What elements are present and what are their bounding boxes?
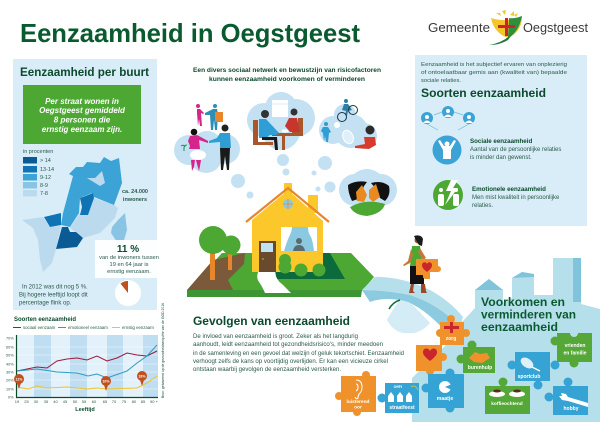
callout: 11 procent: 11 % [117,244,139,255]
legend: in procenten: 13-14 [40,167,54,173]
chart: soorten eenzaamheid: 40% [6,362,14,366]
chart: soorten eenzaamheid: 55 [82,399,87,404]
chart: soorten eenzaamheid: 30 [34,399,39,404]
puzzle: heart [416,345,447,375]
text: emotionele eenzaamheid: Men mist kwaliteit in persoonlijke [472,195,560,201]
body text: gevolgen: aanhoudt, leidt eenzaamheid tot gezondheidsrisico's, minder meedoen [193,342,383,348]
callout: 11 procent: 19 en 64 jaar is [110,262,149,268]
marker: 10 procent [101,376,111,391]
marker: 18 procent [137,371,147,386]
heading: gevolgen: Gevolgen van eenzaamheid [193,314,350,328]
chart: soorten eenzaamheid [6,303,165,413]
marker: 11 procent [14,374,24,389]
logo: Gemeente Oegstgeest: Oegstgeest [523,21,589,35]
chart legend: sociaal eenzaam [23,325,56,330]
definition text: sociale relaties. [421,78,461,84]
garden [187,253,374,291]
text: in 2012 [19,284,88,306]
text: emotionele eenzaamheid: Emotionele eenzaamheid [472,186,546,193]
shrubs [278,254,326,276]
definition text [421,62,567,84]
callout: 11 procent: ernstig eenzaam. [107,269,151,275]
callout: per straat: Per straat wonen in [45,97,119,106]
people: handshake [181,104,231,171]
city background [412,258,600,422]
puzzle: straatfeest: OffFt [394,385,403,389]
label: inwoners: ca. 24.000 [122,189,148,195]
puzzle: hobby: hobby [564,406,579,412]
title: Eenzaamheid in Oegstgeest [20,18,360,48]
icon: emotionele eenzaamheid [433,180,463,210]
icon: couple [348,181,390,216]
marker: 18 procent: 18% [138,374,146,378]
cloud: ontmoeten [174,104,240,173]
marker: 10 procent: 10% [102,380,110,384]
puzzle: koffieochtend [485,378,530,414]
pie chart: 11 procent [115,280,141,306]
people at table [253,100,303,150]
text: sociale eenzaamheid [470,138,561,161]
puzzle: hobby [544,378,588,415]
text: sociale eenzaamheid: is minder dan gewenst. [470,155,532,161]
icon: network [421,106,475,130]
chart: soorten eenzaamheid: 45 [63,399,68,404]
chart legend: emotioneel eenzaam [68,325,108,330]
text: in 2012: In 2012 was dit nog 5 %. [22,284,88,290]
callout: per straat [23,85,141,144]
heading: divers sociaal netwerk: kunnen eenzaamheid voorkomen of verminderen [209,76,365,83]
heading: soorten: Soorten eenzaamheid [421,86,546,100]
body text: gevolgen: ontstaan waarbij gevolgen de eenzaamheid versterken. [193,367,341,373]
chart: soorten eenzaamheid: 10% [6,388,14,392]
chart: soorten eenzaamheid: 60% [6,346,14,350]
icon: sociale eenzaamheid [432,136,462,164]
puzzle: zorg [436,315,470,345]
text: in 2012: Bij hogere leeftijd loopt dit [19,292,88,298]
puzzle: sportclub: sportclub [518,374,540,380]
heading: voorkomen en verminderen: Voorkomen en [481,295,565,309]
label: inwoners [122,189,148,203]
chart: soorten eenzaamheid: 80 [132,399,137,404]
people: cycling, walking, tennis [321,99,376,149]
chart legend [13,325,154,330]
line: ernstig [17,376,157,389]
puzzle: vrienden en familie [550,329,592,368]
definition text: of ontoelaatbaar gemis aan (kwaliteit van) bepaalde [421,70,567,76]
house [246,183,329,272]
logo: Gemeente Oegstgeest [428,10,589,45]
footpath [257,272,291,293]
gevolgen van eenzaamheid [193,314,404,373]
puzzle: luisterend oor: luisterend [347,399,370,405]
round window [283,199,293,209]
definition text: Eenzaamheid is het subjectief ervaren van onplezierig [421,62,567,68]
door [259,241,276,272]
puzzle: maatje [422,368,464,412]
trees [199,226,240,280]
text: in 2012: percentage flink op. [19,300,72,306]
chart: soorten eenzaamheid: 20% [6,378,14,382]
thought bubbles [231,154,336,198]
map of neighbourhoods [22,157,127,272]
puzzle: straatfeest: straatfeest [389,405,415,411]
chart: soorten eenzaamheid: 85 [141,399,146,404]
chart: soorten eenzaamheid: 65 [103,399,108,404]
chart legend: ernstig eenzaam [122,325,154,330]
marker: 11 procent: 11% [16,378,23,382]
label: inwoners: inwoners [123,197,147,203]
puzzle: vrienden en familie: vrienden [565,343,585,349]
callout: 11 procent: van de inwoners tussen [99,255,159,261]
cloud: koppel [339,169,397,216]
chart: soorten eenzaamheid: 70% [6,336,14,340]
window [281,227,317,251]
source note: Bron: gebaseerd op de gezondheidsenquête van de GGD 2016 [161,303,165,398]
chart heading: Soorten eenzaamheid [14,317,76,323]
legend: in procenten: 8-9 [40,183,48,189]
panel: soorten eenzaamheid [415,55,587,226]
line: emotioneel [17,345,157,378]
chart: soorten eenzaamheid: 30% [6,370,14,374]
body text: gevolgen: in de samenleving en een gevoel dat welzijn of geluk tekortschiet. Eenzaamheid [193,351,404,357]
body text: gevolgen [193,334,404,373]
legend: in procenten: 9-12 [40,175,51,181]
logo: Gemeente Oegstgeest: Gemeente [428,21,490,35]
body text: gevolgen: De invloed van eenzaamheid is groot. Zeker als het langdurig [193,334,358,340]
chart: soorten eenzaamheid: 19 [15,399,20,404]
callout: per straat: Oegstgeest gemiddeld [39,106,126,115]
brown path [187,253,245,290]
chart: soorten eenzaamheid: 50 [73,399,78,404]
chart: soorten eenzaamheid: 35 [44,399,49,404]
heading: voorkomen en verminderen [481,295,576,334]
text: sociale eenzaamheid: Aantal van de persoonlijke relaties [470,147,561,153]
chart: soorten eenzaamheid: 70 [112,399,117,404]
text: emotionele eenzaamheid [472,186,560,209]
chart: soorten eenzaamheid: 40 [53,399,58,404]
puzzle: luisterend oor: oor [354,404,362,410]
chart: soorten eenzaamheid: 50% [6,354,14,358]
puzzle: vrienden en familie: en familie [563,350,587,356]
heading: divers sociaal netwerk [193,67,381,83]
text: sociale eenzaamheid: Sociale eenzaamheid [470,138,532,145]
heading: voorkomen en verminderen: eenzaamheid [481,320,558,334]
heading: per buurt: Eenzaamheid per buurt [20,65,149,79]
chart: soorten eenzaamheid: 25 [24,399,29,404]
legend: in procenten: > 14 [40,158,51,164]
cloud: samen eten [247,92,315,150]
flower bed [276,253,345,279]
chart: soorten eenzaamheid: 0% [8,396,14,400]
heading: voorkomen en verminderen: verminderen van [481,308,576,322]
chart: soorten eenzaamheid: 60 [92,399,97,404]
puzzle: burenhulp: burenhulp [468,365,492,371]
house illustration [187,183,374,297]
puzzle: sportclub [508,352,560,390]
callout: per straat: ernstig eenzaam zijn. [42,125,122,134]
bridge [362,277,463,337]
puzzle: straatfeest [378,383,419,413]
cloud: sporten [319,99,377,149]
legend: in procenten [23,149,54,197]
legend: in procenten: 7-8 [40,191,48,197]
axis title: Leeftijd [75,407,95,413]
puzzle: burenhulp [456,340,495,373]
puzzle: maatje: maatje [437,396,453,402]
text: emotionele eenzaamheid: relaties. [472,203,493,209]
woman with puzzle piece [403,235,441,293]
puzzle piece: heart [416,259,441,279]
puzzle: zorg: zorg [446,336,456,342]
panel: eenzaamheid per buurt [13,59,163,310]
callout: per straat: 8 personen die [54,116,111,124]
chart: soorten eenzaamheid: 75 [122,399,127,404]
legend: in procenten: in procenten [23,149,53,155]
puzzle: koffieochtend: koffieochtend [491,401,523,407]
callout: 11 procent [95,240,163,278]
line: sociaal [17,351,157,371]
body text: gevolgen: verhoogt zelfs de kans op voortijdig overlijden. Er kan een vicieuze cirkel [193,359,388,365]
heading: divers sociaal netwerk: Een divers sociaal netwerk en bewustzijn van risicofactoren [193,67,381,74]
puzzle: luisterend oor [335,371,376,416]
chart: soorten eenzaamheid: 90 + [150,399,159,404]
